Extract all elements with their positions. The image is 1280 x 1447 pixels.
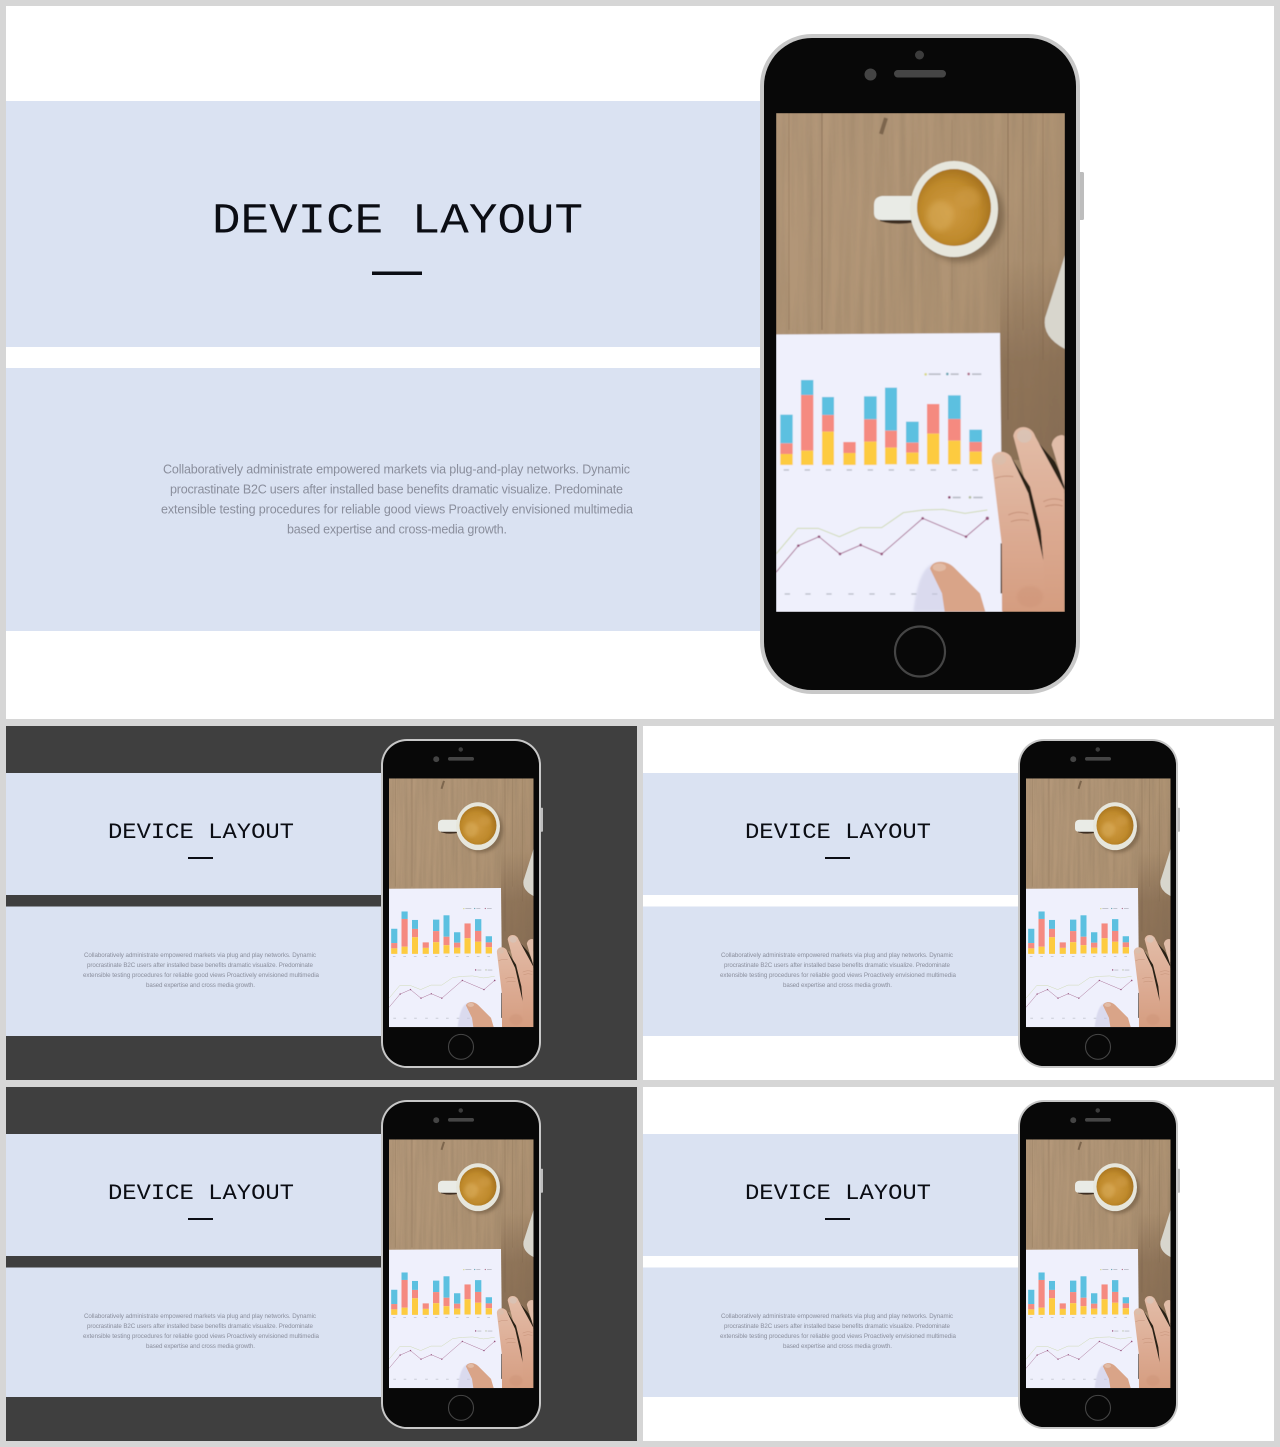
panel: light slide bottom right (643, 1087, 1274, 1441)
phone: light slide top right (1018, 739, 1180, 1068)
body text: procrastinate B2C users after installed base benefits dramatic visualize. Predominate (724, 962, 951, 969)
body text: procrastinate B2C users after installed base benefits dramatic visualize. Predominate (87, 962, 314, 969)
front camera (915, 50, 924, 60)
body text (720, 1313, 957, 1350)
body text: Collaboratively administrate empowered markets via plug and play networks. Dynamic (84, 952, 316, 959)
body text: extensible testing procedures for reliable good views Proactively envisioned multimedia (83, 1333, 320, 1340)
body text: procrastinate B2C users after installed base benefits dramatic visualize. Predominate (724, 1323, 951, 1330)
body text: Collaboratively administrate empowered markets via plug and play networks. Dynamic (721, 1313, 953, 1320)
panel: dark slide top left (6, 726, 637, 1080)
side button (1078, 172, 1084, 220)
text band (6, 1268, 386, 1397)
body text: procrastinate B2C users after installed base benefits dramatic visualize. Predominate (170, 482, 623, 496)
body text: extensible testing procedures for reliable good views Proactively envisioned multimedia (720, 1333, 957, 1340)
heading underline (825, 857, 850, 859)
phone screen photo (776, 113, 1065, 612)
panel: light slide top right (643, 726, 1274, 1080)
heading: DEVICE LAYOUT (108, 820, 294, 845)
body text (83, 952, 320, 989)
body text: Collaboratively administrate empowered markets via plug and play networks. Dynamic (84, 1313, 316, 1320)
body text: procrastinate B2C users after installed base benefits dramatic visualize. Predominate (87, 1323, 314, 1330)
wooden desk (776, 113, 1065, 612)
phone: dark slide bottom left (381, 1100, 543, 1429)
body text: based expertise and cross media growth. (783, 1343, 892, 1350)
title band (643, 773, 1023, 895)
title band (6, 773, 386, 895)
title band (6, 1134, 386, 1256)
text band (6, 906, 386, 1036)
body text: Collaboratively administrate empowered markets via plug and play networks. Dynamic (721, 952, 953, 959)
text band (6, 368, 766, 631)
computer mouse (1045, 255, 1065, 349)
home button (895, 626, 945, 676)
body text: Collaboratively administrate empowered markets via plug-and-play networks. Dynamic (163, 462, 630, 476)
heading: DEVICE LAYOUT (108, 1181, 294, 1206)
phone mockup (760, 34, 1084, 694)
text band (643, 1268, 1023, 1397)
heading: DEVICE LAYOUT (745, 1181, 931, 1206)
title band (6, 101, 766, 347)
heading underline (372, 272, 422, 275)
heading underline (188, 857, 213, 859)
chart legend (924, 373, 983, 499)
line chart (776, 509, 987, 572)
speaker (894, 70, 946, 78)
body text: extensible testing procedures for reliable good views Proactively envisioned multimedia (83, 972, 320, 979)
body text: based expertise and cross media growth. (783, 982, 892, 989)
body text (83, 1313, 320, 1350)
sensor (864, 68, 876, 80)
phone: light slide bottom right (1018, 1100, 1180, 1429)
phone: dark slide top left (381, 739, 543, 1068)
heading: DEVICE LAYOUT (745, 820, 931, 845)
hand (913, 427, 1064, 612)
coffee cup (874, 161, 1004, 262)
body text: extensible testing procedures for reliable good views Proactively envisioned multimedia (161, 502, 633, 516)
bar chart (776, 373, 1064, 612)
panel: main slide (6, 6, 1274, 719)
phone casing (760, 34, 1080, 694)
body text: based expertise and cross media growth. (146, 982, 255, 989)
title band (643, 1134, 1023, 1256)
panel: dark slide bottom left (6, 1087, 637, 1441)
paper sheet (776, 333, 1003, 612)
text band (643, 906, 1023, 1036)
body text: based expertise and cross-media growth. (287, 522, 507, 536)
body text (161, 462, 633, 536)
body text: based expertise and cross media growth. (146, 1343, 255, 1350)
heading underline (188, 1218, 213, 1220)
heading underline (825, 1218, 850, 1220)
heading: DEVICE LAYOUT (212, 196, 583, 246)
body text: extensible testing procedures for reliable good views Proactively envisioned multimedia (720, 972, 957, 979)
phone face (764, 38, 1076, 690)
body text (720, 952, 957, 989)
